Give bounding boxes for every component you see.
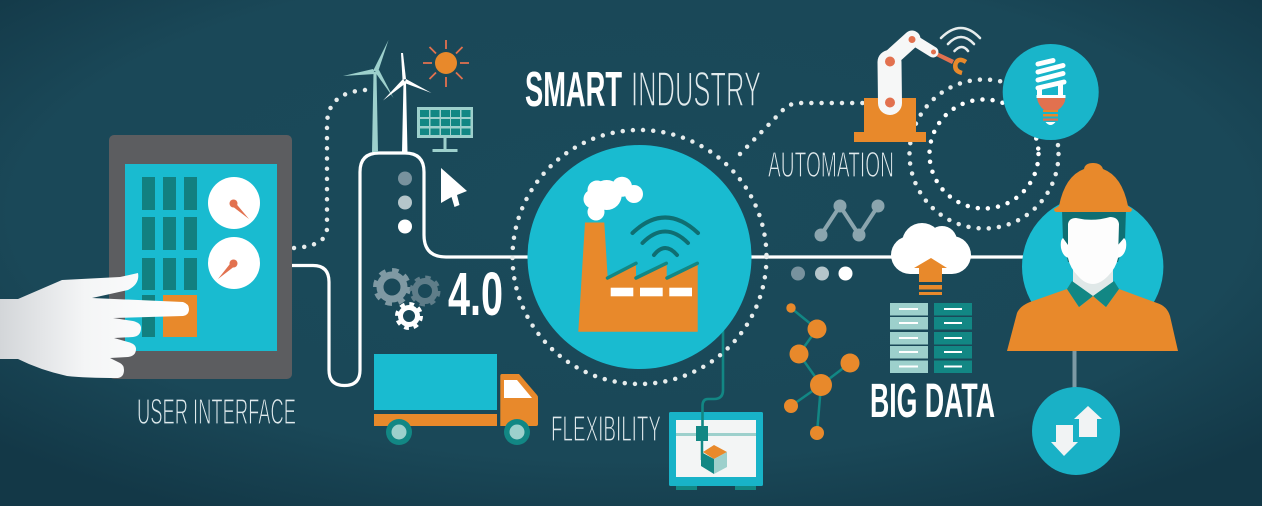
icon: robot wifi bbox=[941, 28, 980, 51]
screen tiles bbox=[142, 177, 197, 337]
icon: factory bbox=[578, 222, 698, 332]
tablet body bbox=[109, 135, 292, 379]
icon: 3D printer bbox=[669, 412, 763, 490]
icon: solar panel bbox=[417, 107, 473, 152]
tablet screen bbox=[125, 164, 277, 351]
face bbox=[1068, 217, 1119, 284]
icon: cloud upload bbox=[891, 223, 971, 295]
icon: wind turbine light bbox=[343, 40, 394, 152]
wifi signal bbox=[632, 218, 698, 255]
heading: 4.0: 4.0 bbox=[448, 260, 503, 328]
heading: big data: BIG DATA bbox=[870, 375, 995, 428]
factory windows bbox=[611, 288, 692, 296]
factory smoke bbox=[584, 177, 643, 220]
heading: automation: AUTOMATION bbox=[768, 144, 894, 185]
neck bbox=[1073, 262, 1113, 297]
status dots horizontal bbox=[791, 266, 852, 280]
panel: tablet user interface bbox=[109, 135, 292, 379]
icon: wind turbine white bbox=[383, 53, 432, 152]
avatar circle bbox=[1022, 196, 1163, 337]
dotted connector: tablet to wind turbines bbox=[294, 90, 366, 248]
icon: line chart bbox=[814, 200, 884, 242]
panel: central factory circle bbox=[528, 145, 752, 369]
robot tool bbox=[936, 52, 954, 64]
heading: user interface: USER INTERFACE bbox=[137, 391, 296, 432]
white connector: tablet through control unit to factory bbox=[292, 153, 530, 386]
robot limbs bbox=[878, 62, 902, 103]
icon: delivery truck bbox=[374, 354, 538, 445]
dotted ring around factory bbox=[512, 130, 766, 384]
heading: smart industry: SMART bbox=[525, 63, 622, 117]
icon: sun bbox=[423, 40, 469, 87]
status dots vertical bbox=[398, 172, 412, 234]
heading: smart industry: INDUSTRY bbox=[631, 63, 761, 117]
icon: light bulb circle bbox=[1003, 44, 1099, 140]
white connector: factory to worker bbox=[750, 255, 1030, 259]
robot base bbox=[854, 98, 926, 142]
heading: flexibility: FLEXIBILITY bbox=[551, 408, 661, 449]
gauge top bbox=[208, 177, 260, 229]
icon: robot arm bbox=[854, 36, 966, 142]
hard hat bbox=[1054, 163, 1132, 212]
panel: worker avatar bbox=[1007, 163, 1178, 351]
teal connector: factory to 3D printer bbox=[702, 330, 723, 430]
dotted ring inner bbox=[930, 100, 1038, 208]
dotted ring outer bbox=[910, 80, 1058, 228]
dotted connector: factory to robot arm bbox=[740, 103, 864, 154]
collar bbox=[1067, 281, 1119, 307]
icon: pointing hand bbox=[0, 273, 189, 378]
hair bbox=[1062, 210, 1126, 262]
gauge bottom bbox=[208, 237, 260, 289]
active orange tile bbox=[163, 295, 197, 337]
icon: data network bbox=[784, 303, 860, 440]
robot joints bbox=[885, 36, 936, 108]
ears bbox=[1061, 238, 1126, 258]
icon: exchange arrows circle bbox=[1032, 387, 1120, 475]
body bbox=[1007, 289, 1178, 351]
icon: server stacks bbox=[890, 303, 972, 373]
connector: worker to arrows bbox=[1072, 351, 1076, 388]
icon: mouse cursor bbox=[441, 168, 467, 207]
factory roof lines bbox=[608, 263, 697, 278]
icon: gears bbox=[376, 270, 438, 328]
robot wrench bbox=[955, 60, 966, 73]
